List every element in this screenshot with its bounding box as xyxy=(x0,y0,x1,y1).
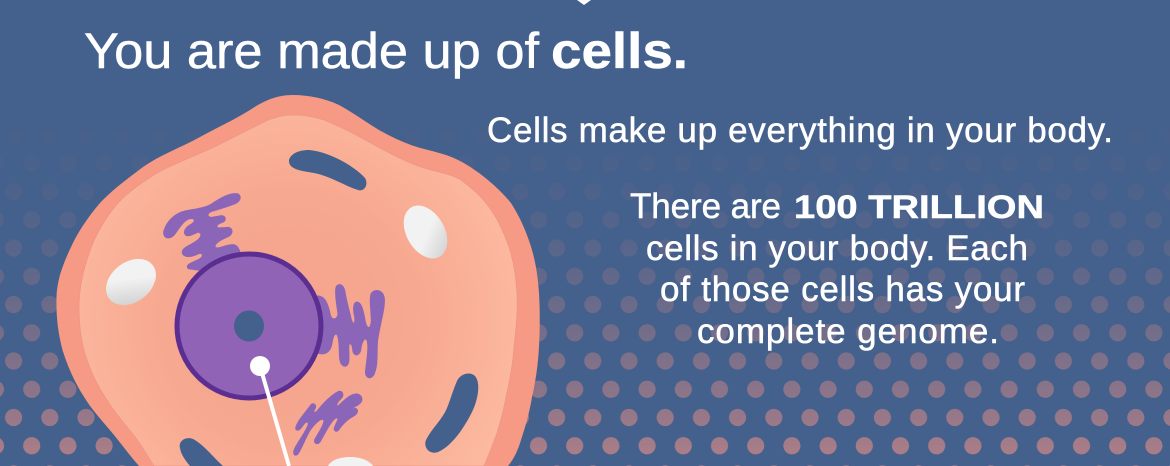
pointer line xyxy=(260,366,289,466)
title: cells. xyxy=(551,23,688,79)
golgi: lower xyxy=(294,392,362,455)
illustration: cell xyxy=(56,95,540,466)
vacuole: bottom xyxy=(328,457,373,466)
text: 100 trillion cells: complete genome. xyxy=(697,312,999,351)
pointer dot xyxy=(250,356,270,376)
mitochondrion: top xyxy=(289,150,366,190)
text: 100 trillion cells xyxy=(630,187,1044,351)
cell membrane xyxy=(56,95,540,466)
vacuole: left xyxy=(97,249,165,315)
title: You are made up of xyxy=(84,23,539,79)
cytoplasm xyxy=(79,115,517,466)
halftone dot pattern xyxy=(0,192,1170,466)
icon: small white pointer at top xyxy=(577,0,591,5)
text: 100 trillion cells: of those cells has your xyxy=(660,270,1025,309)
text: 100 trillion cells: 100 TRILLION xyxy=(794,189,1044,225)
golgi: upper left xyxy=(164,194,240,270)
nucleus xyxy=(177,254,321,398)
text: 100 trillion cells: There are xyxy=(630,187,781,226)
mitochondrion: lower right xyxy=(425,374,478,453)
text: 100 trillion cells: cells in your body. Each xyxy=(646,229,1028,268)
vacuole: right xyxy=(395,198,456,266)
text: cells make up everything: Cells make up everything in your body. xyxy=(487,111,1113,150)
nucleolus xyxy=(234,310,264,342)
golgi: right xyxy=(315,285,384,377)
mitochondrion: bottom left xyxy=(180,438,223,466)
